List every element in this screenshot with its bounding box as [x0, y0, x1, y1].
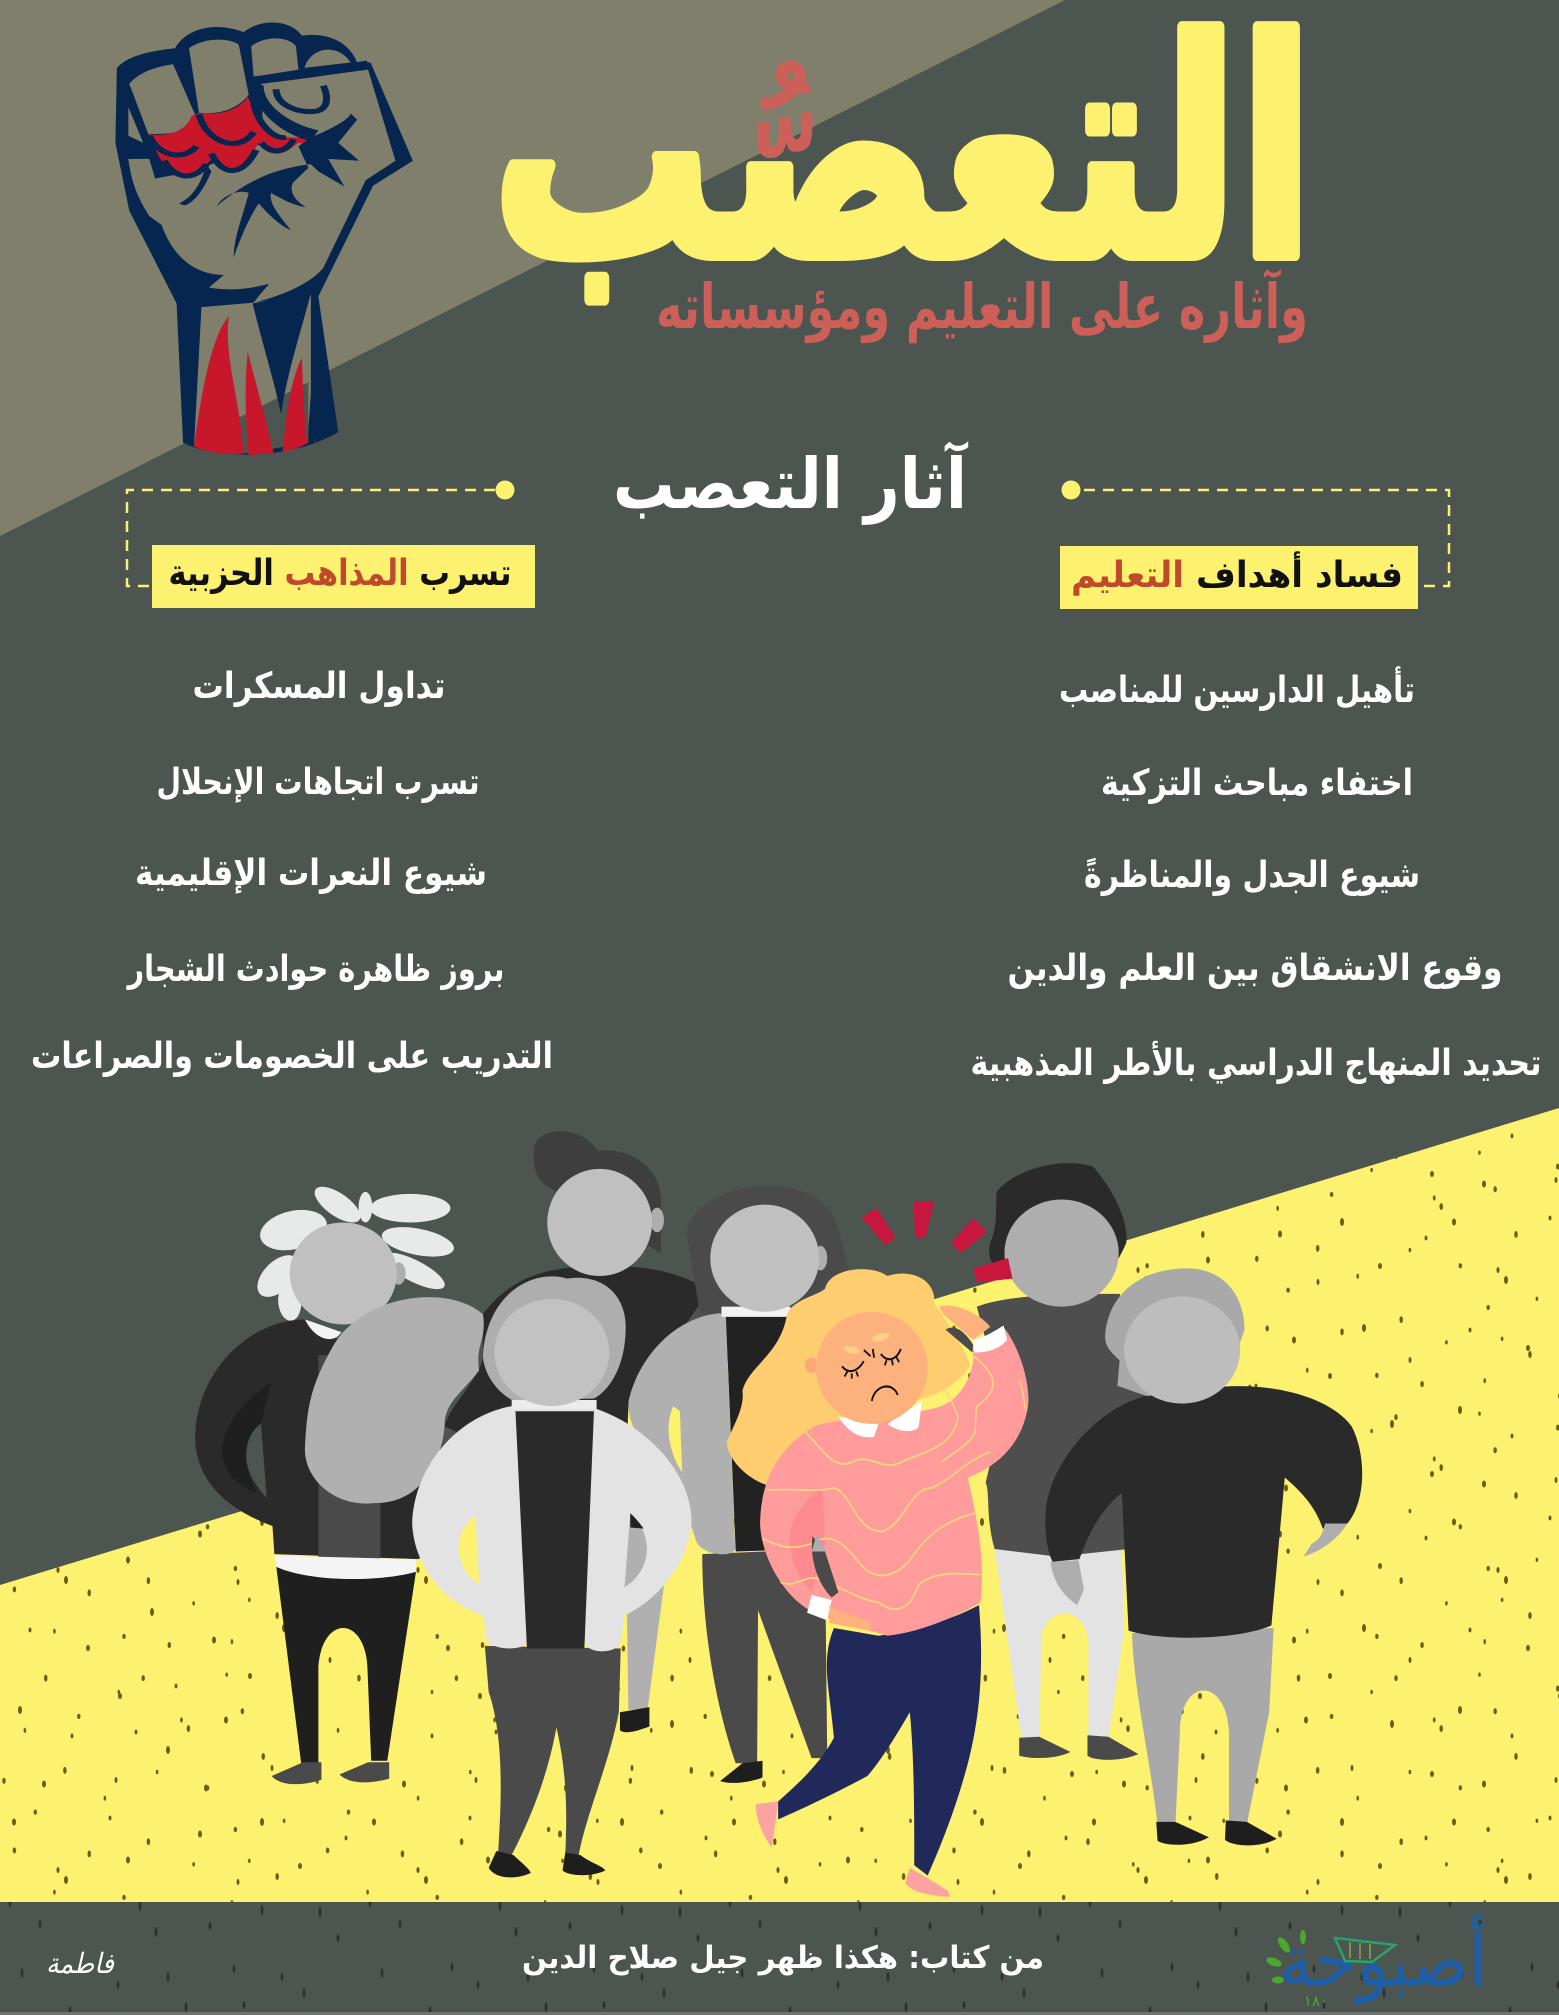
panel: left column heading: [152, 545, 535, 608]
illustration: crowd of people: [195, 1131, 1362, 1897]
heading: effects of bigotry: آثار التعصب: [613, 441, 969, 525]
panel: right column heading: فساد أهداف التعليم: [1071, 551, 1403, 596]
panel: right column heading: [1060, 546, 1418, 609]
olive diagonal corner: [0, 0, 1065, 536]
text block: right list: [970, 666, 1542, 1084]
icon: red alarm ticks: [862, 1201, 1012, 1283]
text block: left list: شيوع النعرات الإقليمية: [135, 853, 487, 894]
person: grey top and white trousers: [977, 1163, 1146, 1760]
subtitle: وآثاره على التعليم ومؤسساته: [656, 268, 1308, 343]
text block: left list: التدريب على الخصومات والصراعات: [31, 1036, 553, 1077]
person: woman in pink sweater: [727, 1269, 1028, 1897]
yellow speckled ground: [0, 1108, 1559, 1902]
person: back with dark hair: [445, 1131, 709, 1732]
logo: Osbouha: أصبوحة: [1279, 1914, 1487, 2004]
panel: left column heading: تسرب المذاهب الحزبية: [168, 553, 511, 594]
person: grey coat, back centre: [628, 1186, 852, 1783]
text block: left list: تداول المسكرات: [192, 666, 446, 707]
title diacritic mark: ُّ: [742, 60, 813, 301]
person: white coat, front: [412, 1276, 692, 1877]
person: black sweater, front right: [1045, 1268, 1362, 1845]
designer signature: فاطمة: [46, 1947, 115, 1980]
panel: footer band: [0, 1902, 1559, 2015]
logo: Osbouha: ١٨٠: [1304, 1992, 1328, 2010]
connector: right column: [1062, 480, 1449, 586]
person: grey wavy hair seen from behind: [305, 1297, 484, 1504]
icon: raised fist: [115, 23, 413, 455]
text block: right list: شيوع الجدل والمناظرةً: [1084, 855, 1420, 896]
connector: left column: [127, 480, 514, 586]
person: white hair, dark coat: [195, 1179, 484, 1784]
source citation: من كتاب: هكذا ظهر جيل صلاح الدين: [522, 1940, 1044, 1976]
text block: left list: تسرب اتجاهات الإنحلال: [156, 762, 480, 803]
text block: right list: تأهيل الدارسين للمناصب: [1059, 666, 1415, 711]
text block: left list: بروز ظاهرة حوادث الشجار: [126, 949, 504, 990]
text block: left list: [31, 666, 553, 1077]
text block: right list: اختفاء مباحث التزكية: [1101, 763, 1413, 804]
